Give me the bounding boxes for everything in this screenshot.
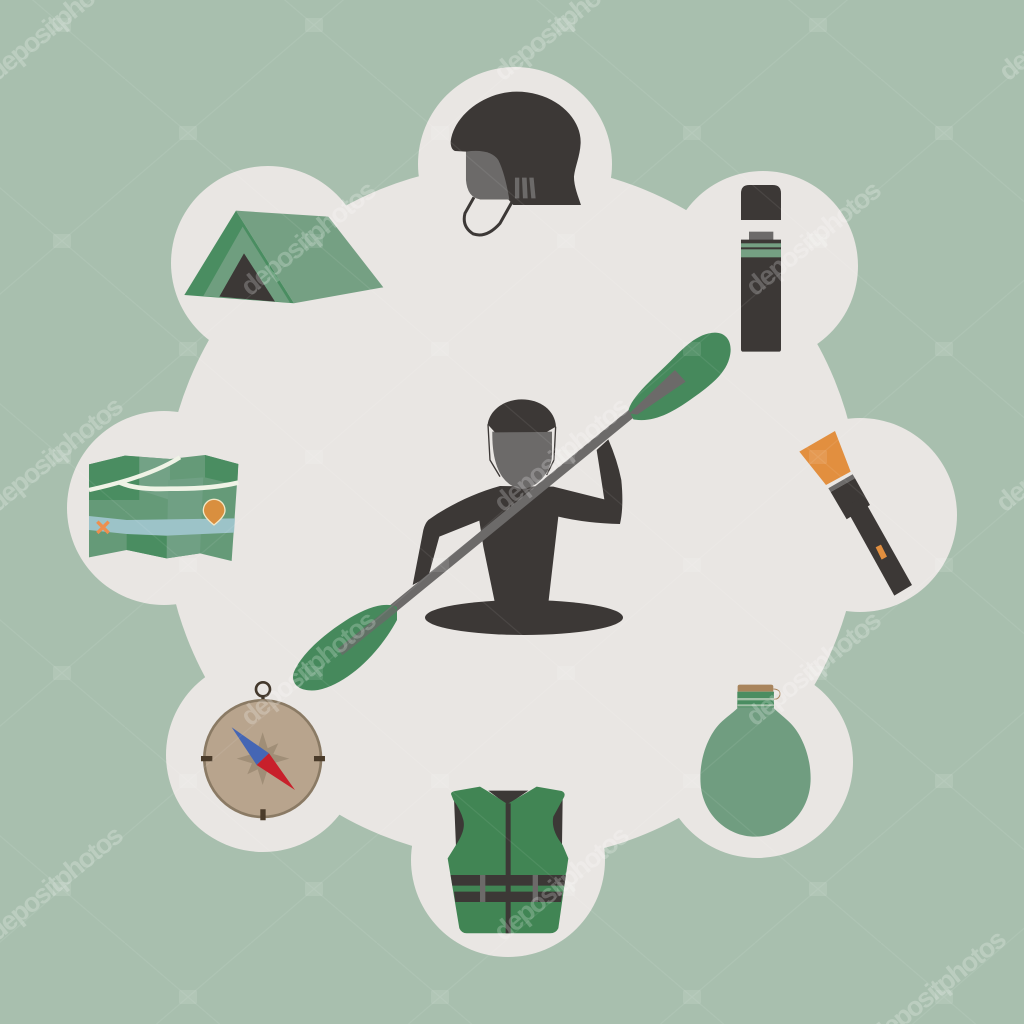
panel: central badge with eight lobes bbox=[67, 67, 957, 957]
watermark text: depositphotos bbox=[740, 175, 887, 302]
paddle shaft bbox=[340, 413, 632, 652]
icon: canteen bbox=[700, 685, 811, 837]
icon: folded map bbox=[89, 455, 238, 561]
paddle upper blade bbox=[629, 333, 731, 420]
icon: thermos bbox=[741, 185, 781, 352]
watermark text: depositphotos bbox=[235, 605, 382, 732]
icon: life vest bbox=[448, 787, 568, 933]
icon: helmet bbox=[451, 92, 581, 235]
kayaker head bbox=[488, 399, 556, 489]
water hole bbox=[425, 600, 623, 635]
kayaker torso and arms bbox=[413, 439, 622, 603]
watermark text: depositphotos bbox=[740, 605, 887, 732]
icon: flashlight bbox=[799, 431, 912, 596]
icon: tent bbox=[184, 211, 383, 303]
icon: compass bbox=[201, 682, 325, 820]
watermark text: depositphotos bbox=[488, 391, 635, 518]
paddle lower blade bbox=[293, 605, 397, 690]
watermark text: depositphotos bbox=[235, 175, 382, 302]
watermark text: depositphotos bbox=[488, 820, 635, 947]
icon: kayaker with paddle bbox=[293, 333, 731, 690]
